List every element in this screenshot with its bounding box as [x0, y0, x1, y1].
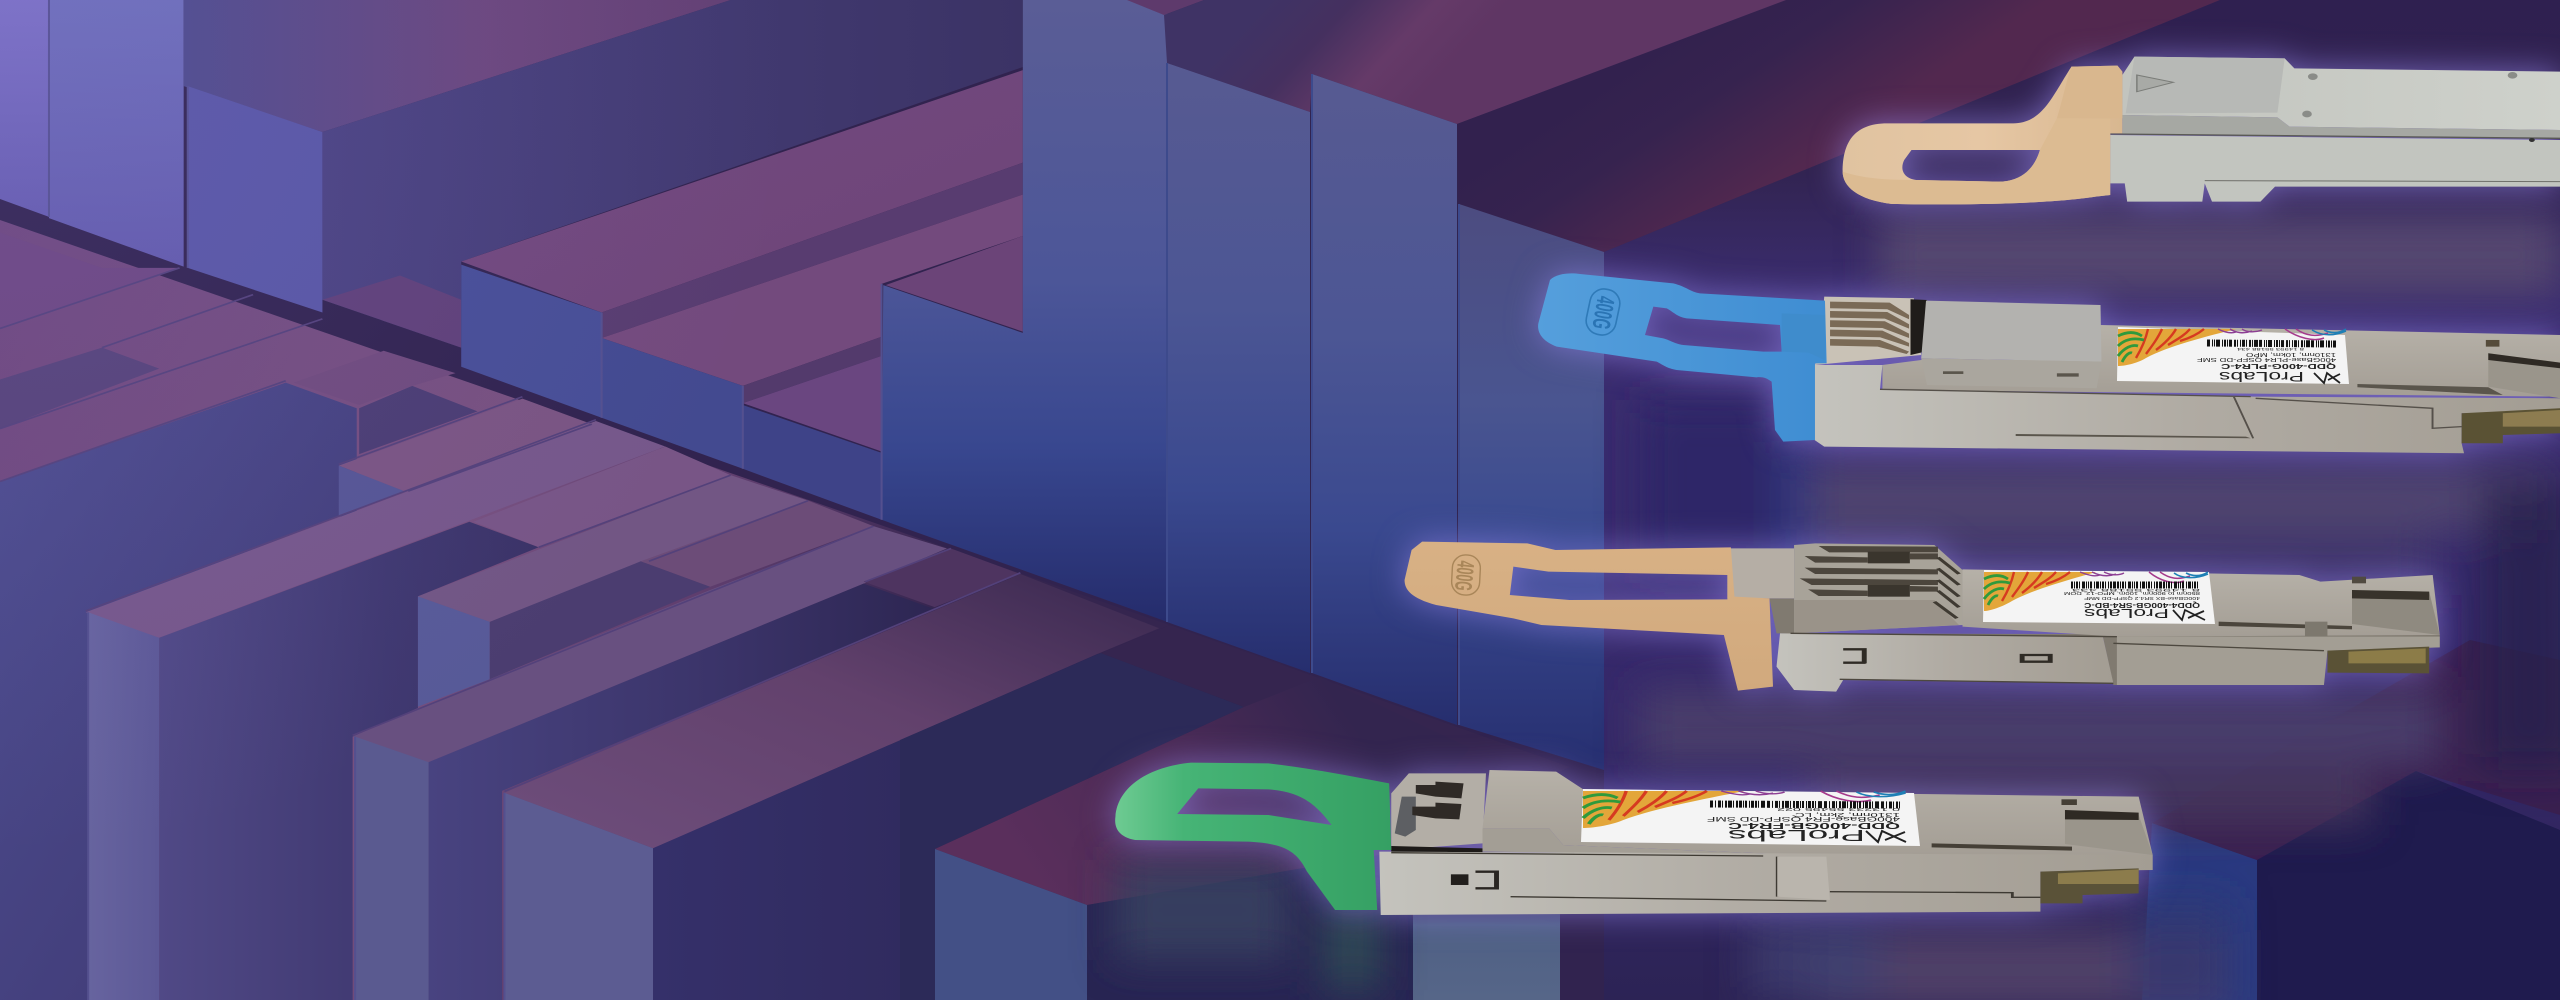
product label: PLR4: 1310nm, 10km, MPO [2246, 351, 2336, 357]
product label: SR4 BD [1983, 570, 2215, 624]
connector block [1391, 773, 1486, 850]
product label: SR4 BD: 8 14993 55188 433 [2072, 588, 2200, 592]
handle marking: 400G [1584, 286, 1622, 338]
icon: ProLabs logo [2173, 610, 2205, 620]
lower body [1815, 365, 2560, 453]
PCB edge [2040, 868, 2139, 903]
product label: PLR4 [2117, 327, 2349, 385]
module 4: tan pull-tab silver QSFP-DD, top [1843, 57, 2560, 204]
body upper [2122, 57, 2560, 130]
product label: PLR4: QDD-400G-PLR4-C [2220, 362, 2336, 371]
background: isometric columns and top planes, right half [900, 0, 2560, 1000]
handle marking: 400G: 400G [1586, 294, 1620, 331]
handle marking: 400G: 400G [1449, 559, 1479, 592]
product label: PLR4: ProLabs [2219, 369, 2304, 385]
product label: SR4 BD: QDD4-400GB-SR4-BD-C [2084, 601, 2200, 608]
right end window and PCB [2488, 353, 2560, 398]
underlay [1769, 598, 2440, 685]
background: blurred module reflections [1115, 215, 2560, 1000]
handle [1538, 273, 1827, 442]
product label: FR4: 1310nm, 2km, LC [1794, 811, 1900, 817]
lower housing [1379, 852, 2153, 915]
fins [1815, 297, 1921, 365]
product label: FR4: 400GBase-FR4 QSFP-DD SMF [1707, 815, 1900, 822]
icon: ProLabs logo [2314, 373, 2340, 383]
module 1: green 400G FR4 [1115, 763, 2153, 915]
background: tint wash [0, 0, 1300, 1000]
icon: vents and latch [1451, 874, 1468, 885]
product label: FR4: 0 13233 55495 022 [1776, 807, 1900, 812]
product label: FR4: ProLabs [1728, 826, 1865, 843]
handle marking: 400G [1449, 554, 1481, 596]
product label: FR4: QDD-400GB-FR4-C [1728, 821, 1900, 831]
product label: SR4 BD: 850nm to 900nm, 100m, MPO-12, DOM [2063, 591, 2200, 596]
product label: FR4 [1581, 789, 1920, 846]
handle [1115, 763, 1391, 910]
front plate [1727, 548, 1794, 598]
lower body [1777, 633, 2113, 692]
background: isometric blocks, left half [0, 0, 1551, 1000]
upper housing [1482, 770, 2153, 855]
icon: ProLabs logo [1866, 831, 1906, 842]
module 2: tan 400G SR4 BD [1405, 542, 2440, 692]
upper body [1882, 325, 2560, 397]
cover [1921, 301, 2101, 362]
handle [1843, 66, 2122, 204]
upper body [1962, 569, 2440, 637]
handle [1405, 542, 1773, 691]
fin cage [1794, 543, 1962, 633]
body lower [2110, 135, 2560, 202]
product label: SR4 BD: ProLabs [2083, 606, 2169, 621]
icon: laser warning triangle [2137, 75, 2173, 92]
product label: PLR4: 8 14993 55188 434 [2236, 347, 2304, 352]
PCB edge [2327, 647, 2429, 673]
product label: SR4 BD: 400GBase-BX SR4.2 QSFP-DD MMF [2084, 596, 2200, 601]
product label: PLR4: 400GBase-PLR4 QSFP-DD SMF [2197, 356, 2336, 362]
module 3: blue 400G PLR4 [1538, 273, 2560, 453]
